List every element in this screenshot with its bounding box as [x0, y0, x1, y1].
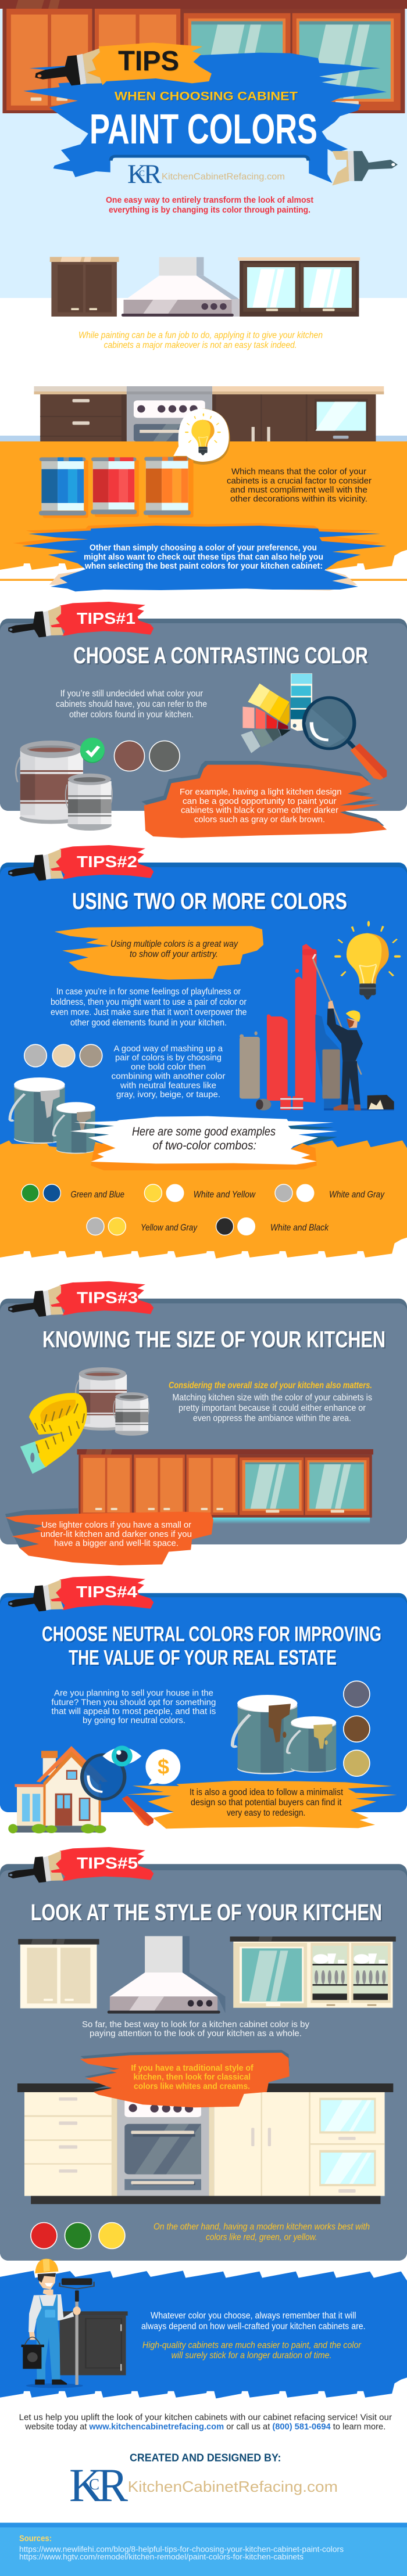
illustration: painter rolling paint stripes and lightbulb	[240, 921, 401, 1111]
text: are you planning: Are you planning to sell your house in the	[54, 1688, 213, 1698]
heading: created and designed by: CREATED AND DESIGNED BY:	[130, 2452, 281, 2463]
badge: tips 3: TIPS#3	[77, 1289, 138, 1307]
panel: sources footer: https://www.newlifehi.com/blog/8-helpful-tips-for-choosing-your-kitchen-cabinet-paint-colors	[19, 2545, 344, 2553]
text: on the other hand: On the other hand, having a modern kitchen works best with	[153, 2222, 370, 2232]
panel: tip 4	[0, 1593, 407, 1812]
callout: orange paint, minimalist design: design so that potential buyers can find it	[191, 1798, 342, 1808]
combo: white and black: White and Black	[270, 1223, 329, 1233]
callout: orange paint, minimalist design	[127, 1781, 397, 1828]
icon: neutral paint buckets	[233, 1695, 336, 1774]
panel: sources footer: Sources:	[19, 2534, 52, 2543]
kitchen upper row: cabinet, hood, glass cabinet	[50, 257, 360, 317]
paint cans: blue, red, orange	[39, 457, 194, 518]
text: a good way: pair of colors is by choosing	[115, 1054, 222, 1063]
text: if you're still undecided: If you’re still undecided what color your	[60, 689, 203, 699]
text: considering overall size	[169, 1381, 372, 1424]
text: a good way: with neutral features like	[120, 1081, 216, 1090]
callout: orange paint, traditional style: If you have a traditional style of	[131, 2064, 254, 2073]
combo: white and yellow: White and Yellow	[194, 1190, 256, 1200]
text: for example: cabinets with black or some other darker	[181, 806, 338, 815]
text: other than simply: Other than simply choosing a color of your preference, you	[90, 543, 317, 552]
combo: green and blue: Green and Blue	[71, 1190, 124, 1200]
panel: sources footer	[0, 2523, 407, 2576]
callout: orange paint, minimalist design: very easy to redesign.	[227, 1808, 305, 1818]
callout: orange paint, use lighter colors: under-lit kitchen and darker ones if you	[41, 1530, 192, 1539]
combo: yellow and gray: Yellow and Gray	[141, 1223, 198, 1233]
logo: KCR footer: C	[89, 2476, 99, 2493]
illustration: cream kitchen lower row with oven	[17, 2083, 393, 2204]
left paint brush with orange paint	[35, 42, 212, 85]
panel: tip 2	[0, 863, 407, 1165]
text: other than simply: when selecting the best paint colors for your kitchen cabinet:	[84, 562, 323, 571]
badge: tips 4	[8, 1576, 153, 1611]
badge: tips 3	[8, 1281, 153, 1317]
callout: orange paint, for example	[141, 761, 387, 838]
text: so far: paying attention to the look of your kitchen as a whole.	[90, 2029, 302, 2039]
text: in case: In case you’re in for some feelings of playfulness or	[56, 987, 241, 997]
combo: yellow and gray	[87, 1217, 198, 1235]
callout: orange paint, use lighter colors	[5, 1508, 213, 1565]
text: whatever color you choose: High-quality cabinets are much easier to paint, and the color	[142, 2341, 362, 2351]
badge: tips 1	[8, 602, 153, 637]
callout: orange paint, multiple colors: Using multiple colors is a great way	[110, 939, 238, 949]
logo: KCR header: R	[144, 159, 162, 189]
icon: brown and gray paint cans with check	[16, 738, 112, 831]
text: for example: For example, having a light kitchen design	[180, 788, 342, 797]
text: in case: other good elements found in your kitchen.	[70, 1018, 227, 1028]
panel: tip 1	[0, 619, 407, 811]
panel: blue closing band	[0, 2270, 407, 2406]
icon: cans and measuring tape	[20, 1367, 149, 1474]
icon: bold color swatches	[31, 2222, 125, 2249]
callout: orange paint, multiple colors	[55, 926, 263, 980]
text: so far	[82, 2020, 310, 2039]
text: considering overall size: Considering the overall size of your kitchen also matters.	[169, 1381, 372, 1391]
panel: orange band with two-color combos	[0, 1140, 407, 1267]
text: a good way: A good way of mashing up a	[114, 1044, 223, 1054]
kitchen lower row: counter, oven, cabinets	[0, 386, 407, 441]
intro text, red	[106, 196, 313, 215]
callout: orange paint, use lighter colors: have a bigger and well-lit space.	[54, 1539, 178, 1549]
illustration: house with magnifier, eye and dollar bubble	[8, 1745, 180, 1833]
illustration: row of orange cabinets	[77, 1449, 373, 1524]
logo: KCR header	[127, 159, 285, 189]
text: on the other hand: colors like red, green, or yellow.	[206, 2233, 317, 2243]
text: so far: So far, the best way to look for a kitchen cabinet color is by	[82, 2020, 310, 2029]
text: a good way: gray, ivory, beige, or taupe.	[116, 1090, 220, 1100]
call to action text	[19, 2413, 392, 2432]
heading: choose neutral colors	[42, 1622, 381, 1669]
text: are you planning: by going for neutral colors.	[83, 1716, 185, 1726]
icon: teal paint buckets with drips	[10, 1077, 95, 1154]
logo: KCR footer	[69, 2459, 338, 2512]
badge: tips 5	[8, 1847, 153, 1882]
logo: KCR header: K	[127, 159, 147, 189]
header background	[0, 0, 407, 298]
title: when choosing cabinet: WHEN CHOOSING CABINET	[115, 89, 298, 103]
combo: white and gray: White and Gray	[329, 1190, 385, 1200]
text: in case: boldness, then you might want to use a pair of color or	[51, 997, 247, 1007]
callout: orange paint, traditional style: colors like whites and creams.	[134, 2082, 250, 2092]
combo: white and black	[216, 1217, 329, 1235]
text: which means: and must compliment well with the	[230, 486, 367, 495]
call to action text: website today at www.kitchencabinetrefacing.com or call us at (800) 581-0694 to learn more.	[24, 2423, 385, 2432]
text: whatever color you choose: always depend on how well-crafted your kitchen cabinets are.	[141, 2322, 366, 2331]
badge: tips 5: TIPS#5	[77, 1854, 138, 1872]
illustration: cream kitchen upper row	[18, 1936, 396, 2014]
icon: dollar sign: $	[158, 1755, 169, 1779]
text: a good way: one bold color then	[131, 1063, 206, 1072]
panel: sources footer: https://www.hgtv.com/remodel/kitchen-remodel/paint-colors-for-kitchen-cabinets	[19, 2553, 304, 2561]
logo: KCR header: KitchenCabinetRefacing.com	[162, 172, 285, 182]
text: if you're still undecided	[56, 689, 207, 720]
panel: orange intro band	[0, 441, 407, 581]
right paint brush, slate handle	[332, 151, 398, 185]
panel: tip 5	[0, 1864, 407, 2261]
callout: orange paint, multiple colors: to show off your artistry.	[130, 950, 218, 960]
logo: KCR footer: KitchenCabinetRefacing.com	[128, 2478, 338, 2495]
callout: orange paint, traditional style: kitchen, then look for classical	[134, 2073, 251, 2082]
blue paint splash callout	[13, 523, 387, 591]
title: paint colors: PAINT COLORS	[90, 106, 317, 153]
text: on the other hand	[153, 2222, 370, 2243]
icon: neutral swatches	[24, 1044, 102, 1067]
callout: lightbulb speech bubble	[173, 408, 230, 465]
intro text, red: everything is by changing its color through painting.	[109, 206, 310, 215]
combo: white and yellow	[144, 1184, 256, 1202]
text: for example: can be a good opportunity to paint your	[183, 797, 337, 806]
text: two-color combos heading: Here are some good examples	[132, 1125, 276, 1138]
text: a good way: combining with another color	[112, 1072, 226, 1081]
text: in case	[51, 987, 247, 1028]
combo: white and gray	[275, 1184, 385, 1202]
callout: white paint, two-color combos	[70, 1116, 337, 1170]
badge: tips 1: TIPS#1	[77, 609, 135, 627]
text: whatever color you choose: will surely stick for a longer duration of time.	[172, 2351, 331, 2361]
text: are you planning: that will appeal to most people, and that is	[51, 1707, 216, 1716]
text: other than simply: might also want to check out these tips that can also help you	[84, 552, 323, 562]
icon: neutral swatch circles	[344, 1681, 370, 1776]
text: in case: even more. Just make sure that it won’t overpower the	[51, 1008, 247, 1018]
text: two-color combos heading	[132, 1125, 276, 1152]
title paint splash, blue	[23, 53, 387, 183]
intro text 2, yellow italic: While painting can be a fun job to do, applying it to give your kitchen	[78, 330, 323, 340]
callout: orange paint, minimalist design: It is also a good idea to follow a minimalist	[190, 1788, 344, 1798]
badge: tips 2	[8, 845, 153, 881]
text: whatever color you choose: Whatever color you choose, always remember that it will	[151, 2311, 356, 2321]
intro text, red: One easy way to entirely transform the look of almost	[106, 196, 313, 205]
text: are you planning	[51, 1688, 216, 1726]
callout: orange paint, use lighter colors: Use lighter colors if you have a small or	[41, 1521, 191, 1530]
text: if you're still undecided: cabinets should have, you can refer to the	[56, 699, 207, 709]
logo: KCR footer: K	[69, 2459, 103, 2512]
text: which means: Which means that the color of your	[231, 468, 366, 477]
badge: tips 4: TIPS#4	[76, 1583, 137, 1601]
callout: orange paint, traditional style	[80, 2050, 290, 2107]
text: considering overall size: Matching kitchen size with the color of your cabinets is	[172, 1393, 372, 1403]
text: for example	[180, 788, 342, 825]
badge: tips 2: TIPS#2	[77, 853, 137, 871]
upper cabinets, orange and teal	[0, 0, 407, 113]
illustration: painter with roller and dark cabinet	[22, 2259, 128, 2388]
combo: green and blue	[22, 1184, 124, 1202]
logo: KCR footer: R	[98, 2459, 128, 2512]
text: which means: other decorations within its vicinity.	[230, 495, 367, 504]
intro text 2, yellow italic: cabinets a major makeover is not an easy task indeed.	[104, 340, 297, 350]
text: a good way	[112, 1044, 226, 1100]
panel: tip 3	[0, 1299, 407, 1544]
text: whatever color you choose	[141, 2311, 366, 2361]
icon: paint swatch fan and magnifier	[241, 673, 387, 780]
text: other than simply	[84, 543, 323, 571]
text: which means: cabinets is a crucial factor to consider	[227, 476, 372, 486]
text: are you planning: future? Then you should opt for something	[51, 1698, 216, 1707]
text: if you're still undecided: other colors found in your kitchen.	[69, 710, 194, 720]
text: considering overall size: pretty important because it could either enhance or	[178, 1403, 366, 1413]
text: considering overall size: even oppress the ambiance within the area.	[193, 1414, 351, 1424]
call to action text: Let us help you uplift the look of your kitchen cabinets with our cabinet refacing service! Visit our	[19, 2413, 392, 2423]
text: two-color combos heading: of two-color combos:	[152, 1139, 256, 1152]
text: which means	[227, 468, 372, 504]
intro text 2, yellow italic	[78, 330, 323, 350]
icon: color swatch circles	[114, 741, 180, 771]
text: for example: colors such as gray or dark brown.	[194, 815, 325, 825]
logo: KCR header: C	[139, 169, 145, 178]
title: tips: TIPS	[118, 46, 179, 77]
